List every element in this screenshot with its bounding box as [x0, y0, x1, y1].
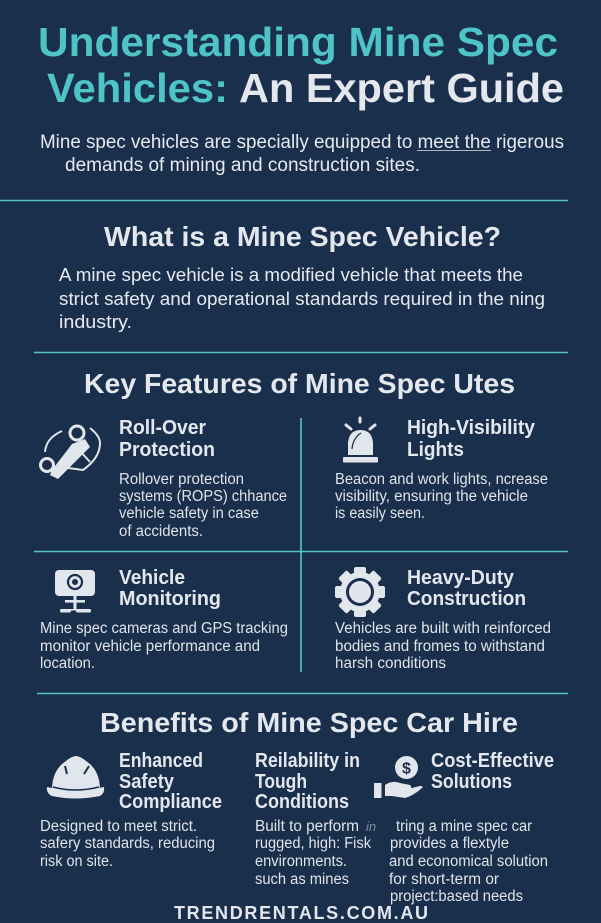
panel: benefits: [40, 707, 554, 905]
heading: what is: What is a Mine Spec Vehicle?: [104, 221, 501, 252]
icon: monitoring camera: [55, 570, 95, 612]
benefit text: rugged, high: Fisk: [255, 835, 371, 852]
benefit text: and economical solution: [389, 853, 548, 870]
heading: benefits: Benefits of Mine Spec Car Hire: [100, 707, 518, 738]
benefit: cost-effective solutions: [374, 749, 554, 905]
benefit text: project:based needs: [390, 888, 523, 905]
icon: gear: [335, 567, 385, 617]
benefit: enhanced safety compliance: [40, 749, 222, 870]
benefit text: [255, 818, 376, 888]
panel: what is a mine spec vehicle: [59, 221, 545, 332]
icon: hand with coin: $: [402, 760, 411, 778]
benefit title: Solutions: [431, 770, 512, 793]
feature title: Lights: [407, 438, 464, 461]
benefit: reliability in tough conditions: [255, 749, 376, 888]
feature text: location.: [40, 655, 95, 672]
panel: key features: [34, 368, 568, 672]
feature text: Beacon and work lights, ncrease: [335, 471, 548, 488]
icon: beacon light: [343, 418, 378, 462]
benefit text: [389, 818, 548, 905]
feature title: [119, 566, 221, 610]
benefit title: [431, 749, 554, 793]
icon: hand with coin: [374, 756, 423, 798]
feature text: Rollover protection: [119, 471, 244, 488]
feature text: of accidents.: [119, 523, 203, 540]
feature text: bodies and fromes to withstand: [335, 638, 545, 655]
intro text: demands of mining and construction sites.: [65, 155, 420, 176]
feature text: [335, 620, 551, 672]
definition text: industry.: [59, 311, 132, 332]
title: Understanding Mine Spec: [38, 19, 558, 65]
feature text: Vehicles are built with reinforced: [335, 620, 551, 637]
intro text: Mine spec vehicles are specially equipped to meet the rigerous: [40, 132, 564, 153]
feature text: [335, 471, 548, 522]
feature title: Monitoring: [119, 587, 221, 610]
benefit title: Conditions: [255, 790, 349, 813]
feature title: Protection: [119, 438, 215, 461]
benefit text: such as mines: [255, 871, 349, 888]
benefit title: Enhanced: [119, 749, 203, 772]
benefit text: risk on site.: [40, 853, 113, 870]
benefit title: [255, 749, 360, 813]
feature title: [407, 566, 526, 610]
icon: hard hat: [47, 756, 104, 798]
benefit title: Tough: [255, 770, 307, 793]
intro text: [40, 132, 564, 176]
benefit text: provides a flextyle: [390, 835, 509, 852]
benefit title: Reilability in: [255, 749, 360, 772]
definition text: [59, 264, 545, 332]
feature text: is easily seen.: [335, 505, 425, 522]
benefit title: Safety: [119, 770, 175, 793]
definition text: A mine spec vehicle is a modified vehicle that meets the: [59, 264, 523, 285]
feature text: Mine spec cameras and GPS tracking: [40, 620, 288, 637]
benefit text: environments.: [255, 853, 347, 870]
feature text: vehicle safety in case: [119, 505, 259, 522]
feature title: Roll-Over: [119, 416, 206, 439]
benefit text: Built to perform: [255, 818, 359, 835]
benefit text: Designed to meet strict.: [40, 818, 197, 835]
benefit text: in: [366, 819, 376, 834]
benefit text: tring a mine spec car: [396, 818, 532, 835]
title: [38, 19, 564, 111]
heading: key features: Key Features of Mine Spec Utes: [84, 368, 515, 399]
feature text: [40, 620, 288, 672]
feature title: Vehicle: [119, 566, 185, 589]
feature text: systems (ROPS) chhance: [119, 488, 287, 505]
title: Vehicles:: [47, 65, 228, 111]
footer website: TRENDRENTALS.COM.AU: [174, 903, 428, 923]
feature title: Construction: [407, 587, 526, 610]
feature: heavy-duty construction: [335, 566, 551, 672]
benefit text: for short-term or: [389, 871, 499, 888]
feature: high-visibility lights: [335, 416, 548, 522]
title: An Expert Guide: [239, 65, 564, 111]
definition text: strict safety and operational standards required in the ning: [59, 288, 545, 309]
feature text: visibility, ensuring the vehicle: [335, 488, 528, 505]
benefit title: [119, 749, 222, 813]
feature title: [119, 416, 215, 461]
feature text: harsh conditions: [335, 655, 446, 672]
feature title: High-Visibility: [407, 416, 536, 439]
feature: vehicle monitoring: [40, 566, 288, 672]
feature: roll-over protection: [40, 416, 287, 540]
benefit title: Cost-Effective: [431, 749, 554, 772]
benefit title: Compliance: [119, 790, 222, 813]
feature title: [407, 416, 536, 461]
feature text: monitor vehicle performance and: [40, 638, 260, 655]
benefit text: safery standards, reducing: [40, 835, 215, 852]
feature title: Heavy-Duty: [407, 566, 515, 589]
icon: rolling car: [40, 426, 100, 479]
benefit text: [40, 818, 215, 870]
feature text: [119, 471, 287, 540]
